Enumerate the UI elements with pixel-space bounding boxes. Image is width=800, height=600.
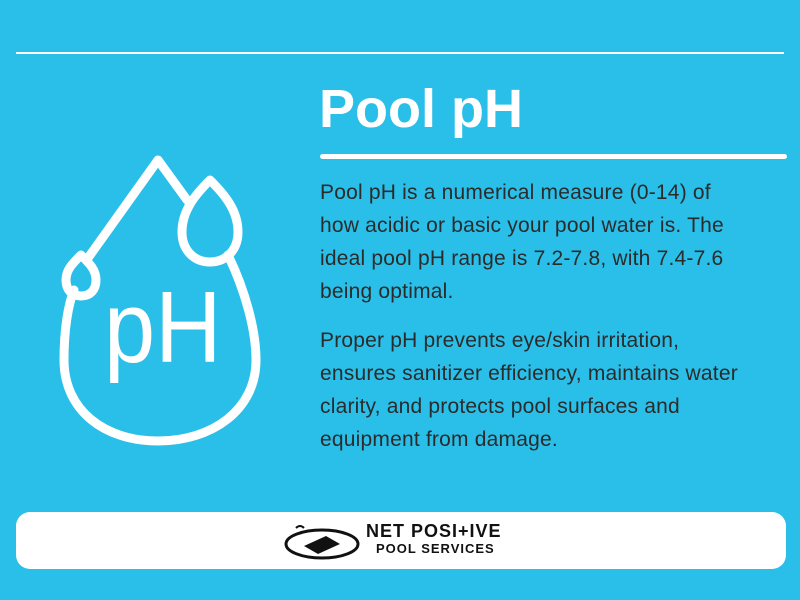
text block: definition: equipment from damage. [320,428,558,451]
text block: definition: Pool pH is a numerical measure (0-14) of [320,181,711,204]
text block: definition [320,181,738,451]
logo text [366,521,502,556]
logo text: POOL SERVICES [376,541,495,556]
text block: definition: being optimal. [320,280,454,303]
text block: definition: ideal pool pH range is 7.2-7.8, with 7.4-7.6 [320,247,723,270]
title: Pool pH [319,79,523,139]
text block: definition: clarity, and protects pool surfaces and [320,395,680,418]
icon: pH water drop: pH [104,271,222,384]
footer panel: logo [16,512,786,569]
title underline [320,154,787,159]
text block: definition: ensures sanitizer efficiency, maintains water [320,362,738,385]
text block: definition: how acidic or basic your pool water is. The [320,214,724,237]
icon: pH water drop [60,156,260,446]
icon: pool logo [284,525,360,560]
logo text: NET POSI+IVE [366,521,502,541]
text block: definition: Proper pH prevents eye/skin irritation, [320,329,679,352]
